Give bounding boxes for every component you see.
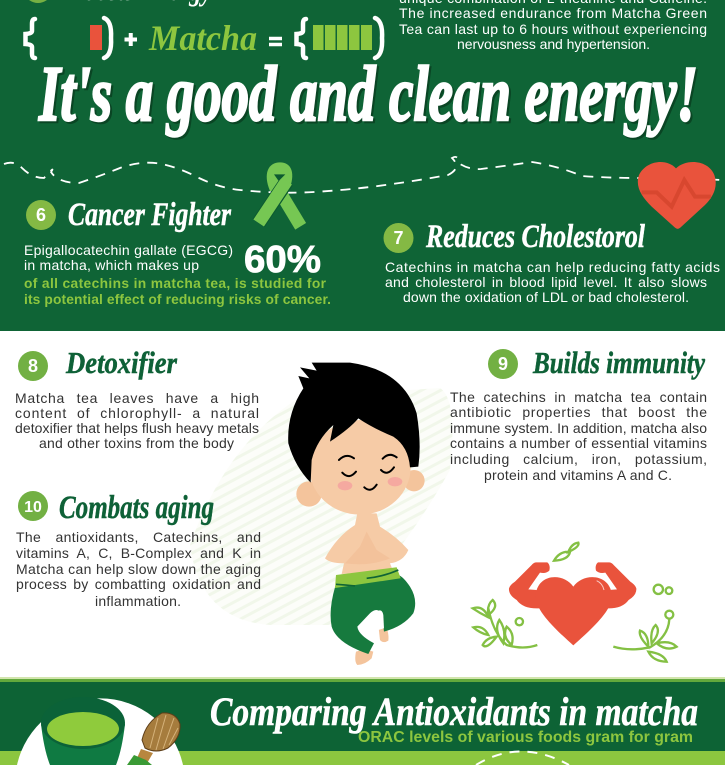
icon: bamboo whisk xyxy=(127,713,180,765)
sash xyxy=(335,567,401,588)
panel: green energy section xyxy=(0,0,725,331)
highlighted text xyxy=(24,276,331,307)
body text xyxy=(385,259,720,305)
body text xyxy=(16,529,261,609)
body text: in matcha, which makes up xyxy=(24,257,199,273)
body text: Catechins in matcha can help reducing fatty acids xyxy=(385,259,720,275)
section 5 text block xyxy=(399,0,707,52)
body text: antibiotic properties that boost the xyxy=(450,404,707,420)
section 5 text block: nervousness and hypertension. xyxy=(457,36,650,52)
body text: inflammation. xyxy=(95,593,181,609)
torso and praying hands xyxy=(325,513,408,574)
face xyxy=(309,420,411,515)
icon: muscular heart with leaves xyxy=(473,543,677,662)
body text: protein and vitamins A and C. xyxy=(484,467,672,483)
section 5 number badge xyxy=(29,0,47,3)
heading: Combats aging xyxy=(59,490,214,526)
plus sign xyxy=(124,33,137,46)
icon: green ribbon xyxy=(259,162,301,226)
number badge 6: 6 xyxy=(36,205,46,225)
number badge 8: 8 xyxy=(28,356,38,376)
section 10: combats aging xyxy=(16,490,261,609)
icon: heart with pulse xyxy=(638,162,716,229)
ears xyxy=(296,470,425,507)
equals sign xyxy=(269,38,282,44)
highlighted text: of all catechins in matcha tea, is studied for xyxy=(24,276,327,291)
number badge 7: 7 xyxy=(393,228,404,248)
flexing arms xyxy=(509,562,636,608)
body text: process by combatting oxidation and xyxy=(16,576,261,592)
body text: Matcha tea leaves have a high xyxy=(15,390,259,406)
number badge 6 xyxy=(26,200,56,230)
body text xyxy=(450,389,707,483)
leaves xyxy=(473,543,677,662)
matcha word: Matcha xyxy=(148,18,257,58)
body text: vitamins A, C, B-Complex and K in xyxy=(16,545,261,561)
dashed arc xyxy=(476,752,569,765)
number badge 7 xyxy=(384,223,414,253)
60% figure: 60% xyxy=(244,239,321,281)
body text: Epigallocatechin gallate (EGCG) xyxy=(24,242,233,258)
section 9: builds immunity xyxy=(450,345,707,483)
body text: The antioxidants, Catechins, and xyxy=(16,529,261,545)
section 5 text block: The increased endurance from Matcha Green xyxy=(399,5,707,21)
number badge 9: 9 xyxy=(498,354,508,374)
section 7: reduces cholesterol xyxy=(384,219,720,305)
white circle backdrop xyxy=(17,698,183,765)
number badge 8 xyxy=(18,351,48,381)
section 6: cancer fighter xyxy=(24,197,331,307)
body text: contains a number of essential vitamins xyxy=(450,435,707,451)
body text: down the oxidation of LDL or bad cholesterol. xyxy=(403,289,689,305)
body text: The catechins in matcha tea contain xyxy=(450,389,707,405)
number badge 10: 10 xyxy=(24,499,42,516)
panel: white benefits section xyxy=(0,331,725,678)
body text: content of chlorophyll- a natural xyxy=(15,405,259,421)
body text: including calcium, iron, potassium, xyxy=(450,451,707,467)
equation: battery plus matcha equals full battery xyxy=(26,18,382,58)
heart xyxy=(536,577,612,645)
banner subtitle: ORAC levels of various foods gram for gram xyxy=(358,729,693,746)
body text: detoxifier that helps flush heavy metals xyxy=(15,420,259,436)
body text: and other toxins from the body xyxy=(39,435,234,451)
section 5 text block: Tea can last up to 6 hours without experiencing xyxy=(399,21,707,37)
icon: matcha bowl xyxy=(41,697,125,765)
icon: full battery xyxy=(296,18,382,58)
heading: Detoxifier xyxy=(65,345,178,380)
body text xyxy=(24,242,233,273)
body text: immune system. In addition, matcha also xyxy=(450,420,707,436)
heading: Reduces Cholestorol xyxy=(425,219,646,255)
icon: low battery xyxy=(26,18,111,58)
number badge 10 xyxy=(18,491,48,521)
panel: comparing antioxidants banner xyxy=(0,677,725,765)
hair xyxy=(288,363,420,483)
closed eyes, cheeks and smile xyxy=(338,455,402,490)
body text: and cholesterol in blood lipid level. It also slows xyxy=(385,274,707,290)
body text xyxy=(15,390,259,451)
heading: Cancer Fighter xyxy=(68,197,232,233)
section 8: detoxifier xyxy=(15,345,259,451)
legs and trousers xyxy=(331,575,415,665)
illustration: meditating boy xyxy=(288,363,425,665)
highlighted text: its potential effect of reducing risks of cancer. xyxy=(24,292,331,307)
number badge 9 xyxy=(488,349,518,379)
body text: Matcha can help slow down the aging xyxy=(16,561,261,577)
